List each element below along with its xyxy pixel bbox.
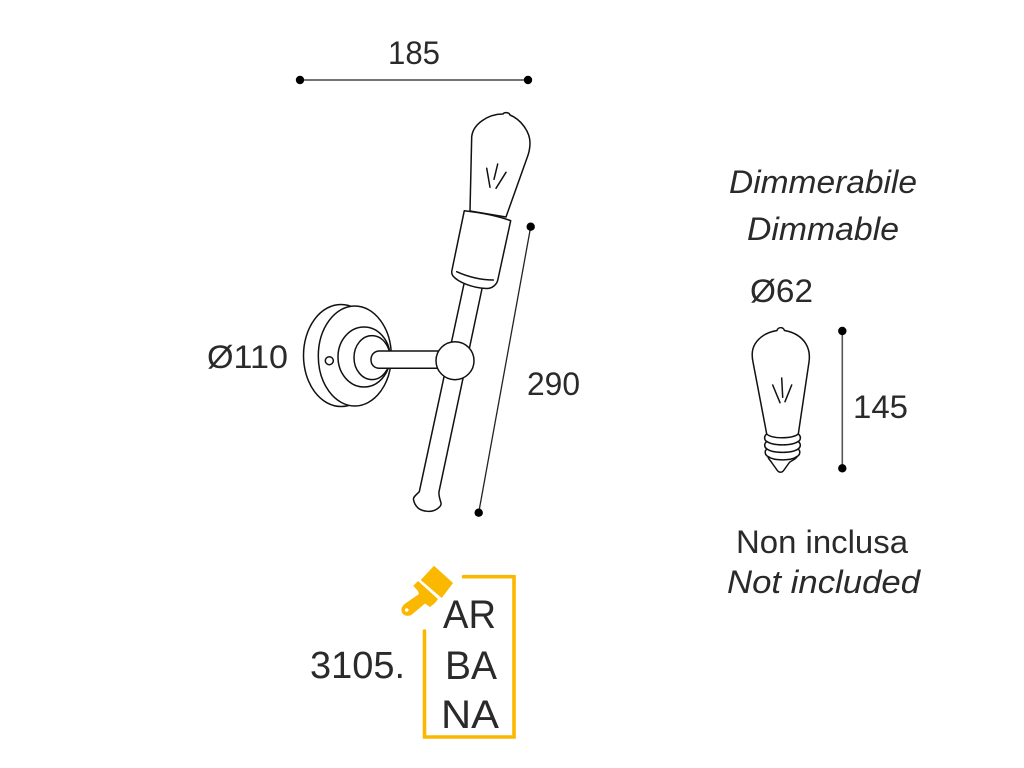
screw thread bbox=[765, 434, 800, 472]
dimmable label: Dimmerabile bbox=[729, 164, 917, 200]
dimmable label: Dimmable bbox=[747, 211, 899, 247]
Arbana logo bbox=[401, 566, 514, 737]
bulb diameter label: Ø62 bbox=[750, 273, 813, 309]
joint ball bbox=[436, 342, 474, 380]
wall lamp drawing bbox=[304, 113, 530, 511]
logo frame bbox=[424, 577, 514, 737]
filament bbox=[773, 378, 792, 403]
bulb glass bbox=[470, 113, 530, 217]
width dimension: 185 bbox=[296, 35, 532, 84]
bulb height dimension: 145: 145 bbox=[853, 389, 908, 425]
logo text: BA bbox=[445, 644, 497, 688]
arm bbox=[371, 351, 440, 368]
wall plate bbox=[304, 304, 391, 406]
lamp stem bbox=[413, 275, 485, 511]
height dimension: 290 bbox=[474, 222, 580, 517]
height dimension: 290: 290 bbox=[527, 366, 580, 402]
icon: paintbrush bbox=[401, 566, 453, 616]
not included note bbox=[727, 524, 921, 600]
bulb filament bbox=[487, 164, 506, 188]
bulb height dimension: 145 bbox=[838, 327, 908, 472]
logo text: AR bbox=[443, 593, 496, 637]
not included note: Non inclusa bbox=[736, 524, 908, 560]
not included note: Not included bbox=[727, 564, 921, 600]
bulb outline bbox=[752, 328, 809, 434]
dimmable label bbox=[729, 164, 917, 247]
product code: 3105. bbox=[310, 645, 405, 687]
width dimension: 185: 185 bbox=[388, 35, 440, 71]
bulb drawing bbox=[752, 328, 809, 472]
logo text: NA bbox=[441, 693, 499, 737]
plate diameter label: Ø110 bbox=[207, 339, 288, 375]
lamp socket bbox=[452, 211, 511, 288]
logo text bbox=[441, 593, 499, 737]
